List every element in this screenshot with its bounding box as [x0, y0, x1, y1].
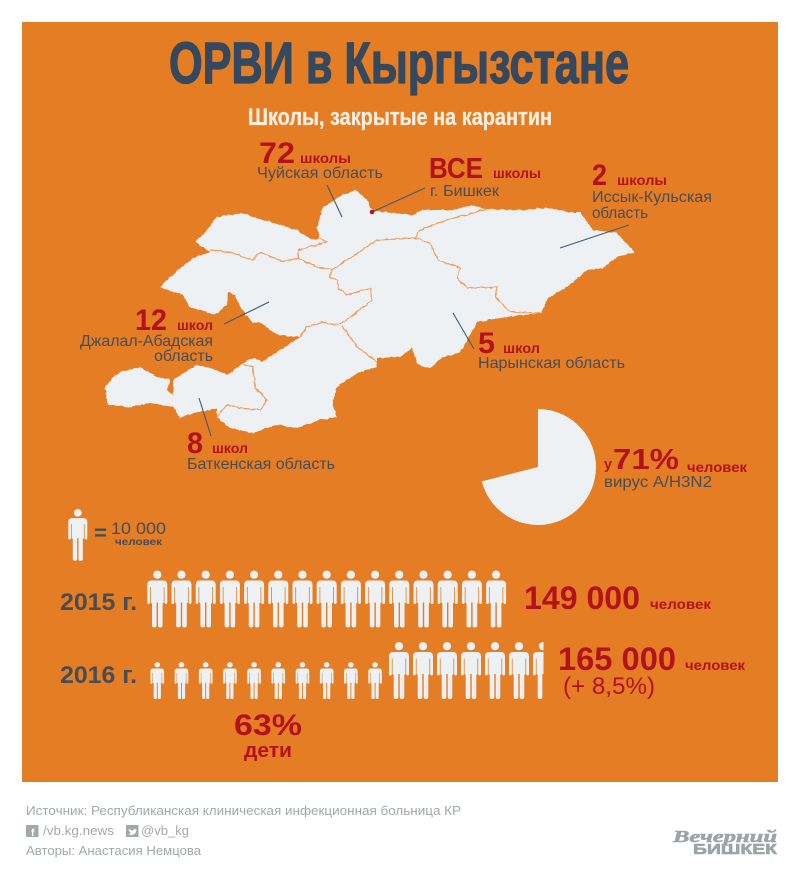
- callout: Chui region: Чуйская область: [257, 165, 383, 182]
- pictogram row 2016: children: [150, 662, 382, 699]
- icon: twitter: [126, 825, 138, 837]
- callout: Chui region: [257, 137, 383, 217]
- callout: Issyk-Kul region: [560, 159, 712, 248]
- callout: Issyk-Kul region: область: [592, 205, 648, 222]
- social links: @vb_kg: [141, 823, 189, 838]
- callout: Batken region: [187, 398, 335, 473]
- children share: дети: [244, 740, 292, 762]
- pie caption: у: [604, 456, 613, 473]
- logo: Vecherny Bishkek: БИШКЕК: [693, 842, 777, 858]
- region borders: [210, 209, 541, 417]
- subtitle: Школы, закрытые на карантин: [248, 104, 552, 131]
- callout: Jalal-Abad region: область: [154, 348, 213, 365]
- map landmass: [105, 190, 635, 433]
- callout: Batken region: школ: [212, 440, 248, 456]
- source line: Источник: Республиканская клиническая инфекционная больница КР: [26, 803, 461, 818]
- callout: Chui region: школы: [300, 150, 351, 166]
- callout: Chui region: 72: [259, 137, 295, 170]
- callout: Jalal-Abad region: [80, 302, 269, 365]
- children share: 63%: [234, 709, 302, 742]
- total 2015: [524, 580, 712, 616]
- callout: Naryn region: 5: [478, 327, 495, 360]
- pie caption: [604, 444, 748, 491]
- callout: Bishkek: г. Бишкек: [430, 183, 500, 200]
- callout: Naryn region: Нарынская область: [478, 355, 625, 372]
- authors: Авторы: Анастасия Немцова: [26, 843, 202, 858]
- children share: [234, 709, 302, 762]
- pie caption: вирус A/H3N2: [604, 474, 712, 491]
- social links: /vb.kg.news: [43, 823, 115, 838]
- callout: Issyk-Kul region: 2: [592, 159, 607, 192]
- total 2015: человек: [650, 596, 712, 612]
- icon: facebook: f: [31, 828, 35, 839]
- callout: Naryn region: школ: [503, 340, 540, 356]
- pie caption: 71%: [613, 444, 679, 476]
- title: ОРВИ в Кыргызстане: [169, 31, 629, 96]
- callout: Naryn region: [453, 313, 625, 372]
- callout: Jalal-Abad region: 12: [135, 304, 167, 337]
- legend: one figure equals 10 000 people: 10 000: [111, 519, 166, 538]
- social links: [26, 823, 189, 839]
- callout: Bishkek: ВСЕ: [429, 153, 483, 185]
- pie chart: 71%: [482, 409, 596, 525]
- total 2015: 149 000: [524, 580, 640, 616]
- logo: Vecherny Bishkek: Вечерний: [672, 827, 777, 846]
- pictogram row 2015: [147, 571, 506, 628]
- callout: Issyk-Kul region: школы: [617, 172, 667, 188]
- callout: Jalal-Abad region: школ: [177, 317, 213, 333]
- callout: Bishkek: школы: [493, 165, 541, 181]
- pie caption: человек: [687, 459, 748, 475]
- total 2016: человек: [685, 657, 746, 673]
- total 2016: (+ 8,5%): [563, 673, 655, 700]
- icon: facebook: [26, 825, 38, 839]
- total 2016: [558, 641, 746, 700]
- logo: Vecherny Bishkek: [672, 827, 777, 858]
- pictogram row 2016: adults: [389, 642, 553, 699]
- legend: one figure equals 10 000 people: человек: [115, 537, 163, 548]
- year label 2015: 2015 г.: [60, 589, 137, 616]
- callout: Bishkek: [370, 153, 541, 214]
- legend: one figure equals 10 000 people: [68, 509, 166, 561]
- year label 2016: 2016 г.: [60, 662, 137, 689]
- map of Kyrgyzstan: [105, 190, 635, 433]
- callout: Batken region: Баткенская область: [187, 456, 335, 473]
- callout: Issyk-Kul region: Иссык-Кульская: [592, 189, 712, 206]
- total 2016: 165 000: [558, 641, 676, 677]
- callout: Batken region: 8: [187, 427, 203, 460]
- callout: Jalal-Abad region: Джалал-Абадская: [80, 333, 213, 350]
- legend: one figure equals 10 000 people: =: [94, 522, 107, 545]
